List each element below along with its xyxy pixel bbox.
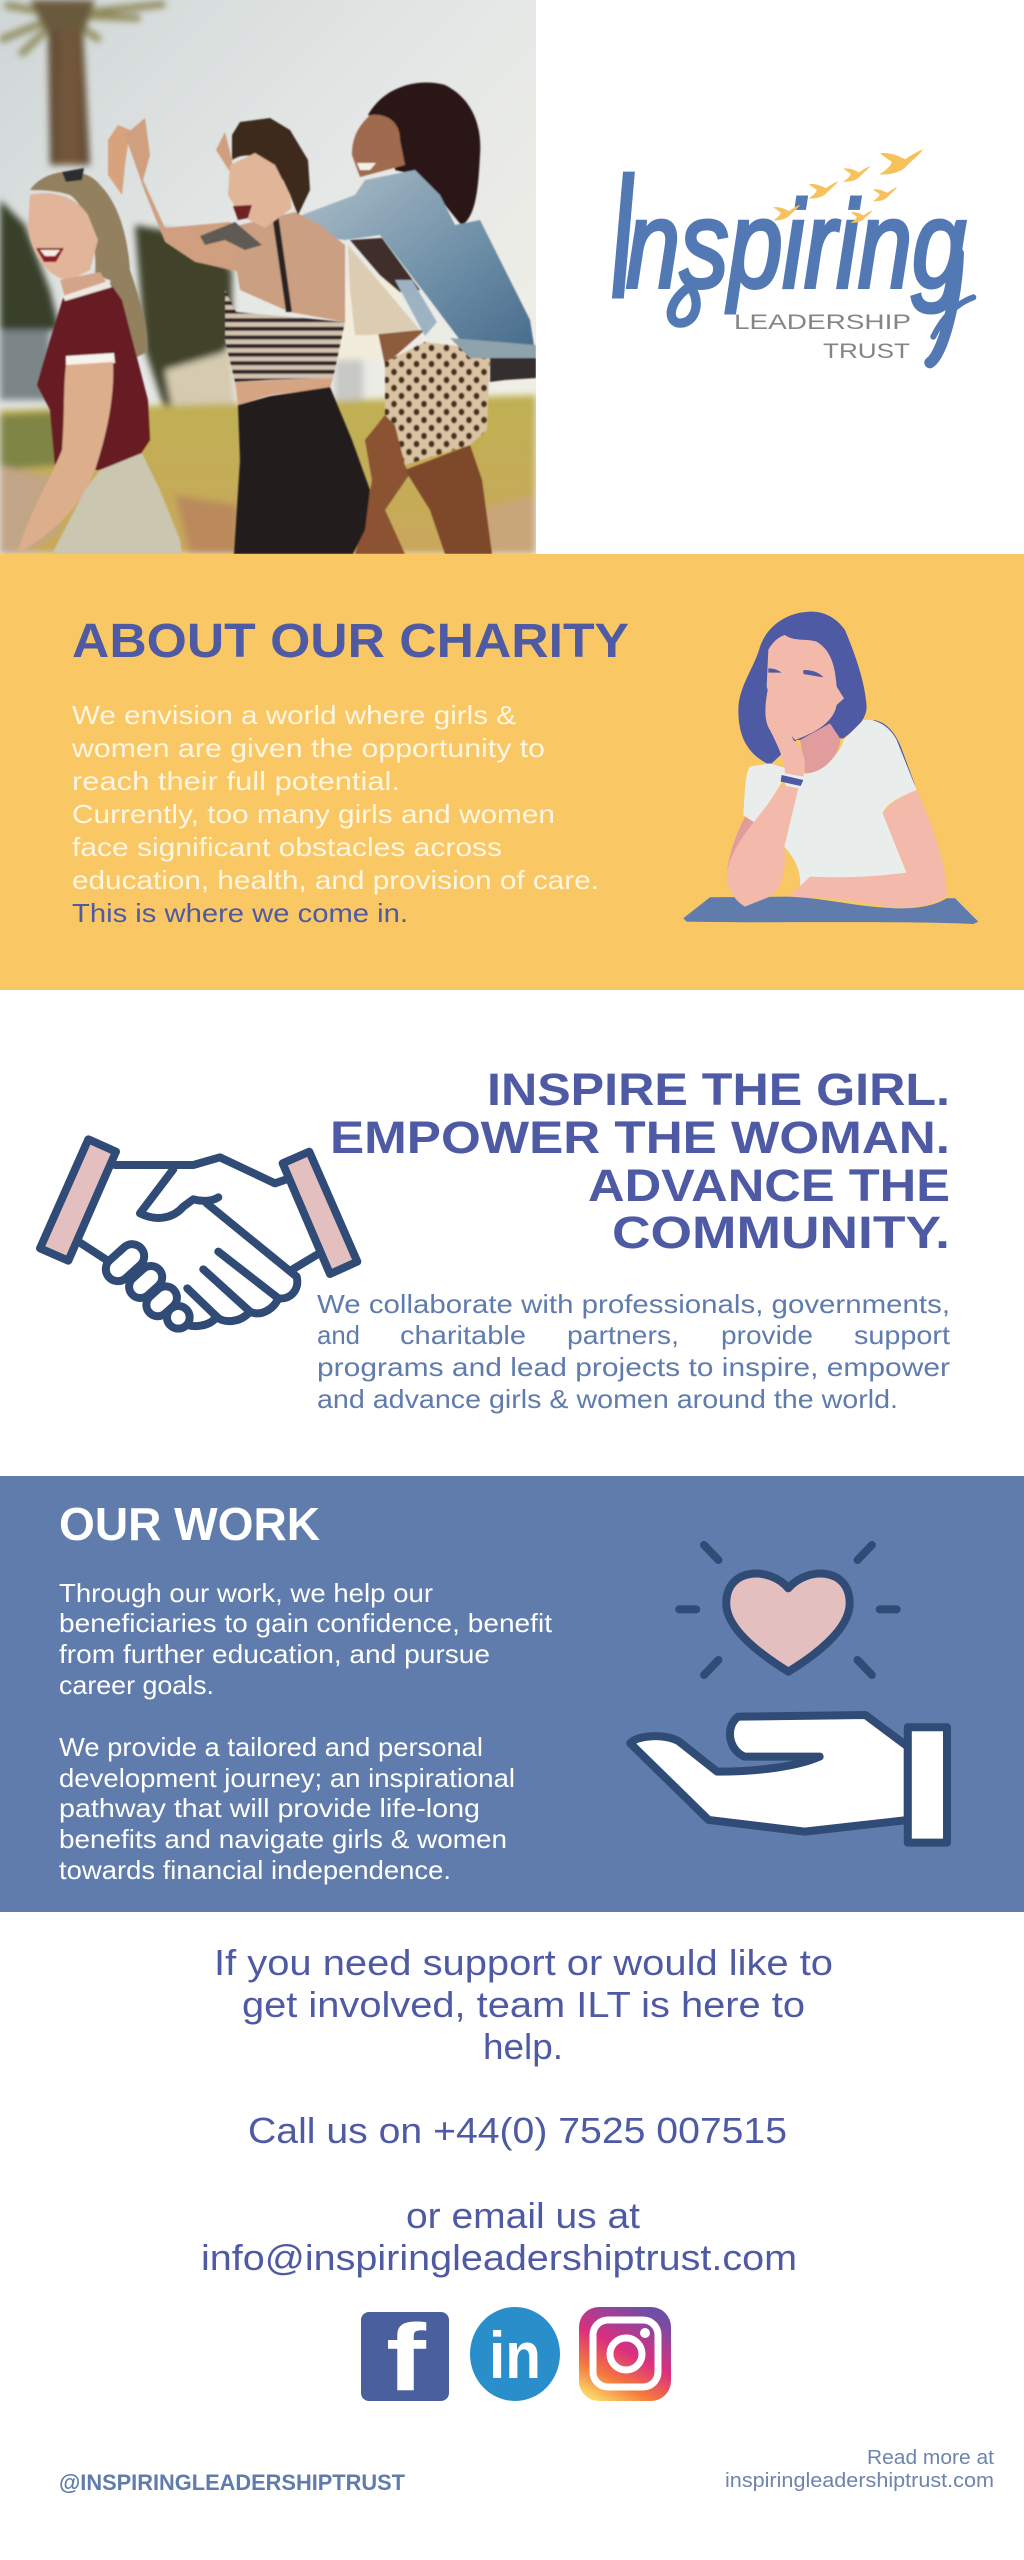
our work body text: from further education, and pursue [59,1639,490,1669]
panel: about our charity [0,554,1024,990]
photo: three women walking [0,0,536,554]
mission body text: We collaborate with professionals, governments, [317,1289,950,1319]
contact text: info@inspiringleadershiptrust.com [201,2237,797,2278]
right woman [302,83,536,554]
contact text: help. [483,2026,563,2067]
icon: open hand [630,1715,947,1843]
mission body text [317,1289,951,1414]
mission body text: and [317,1320,360,1350]
mission heading [330,1064,950,1258]
about body text: This is where we come in. [72,898,408,928]
our work body text: beneficiaries to gain confidence, benefit [59,1608,553,1638]
our work heading: OUR WORK [59,1498,320,1550]
logo: Inspiring Leadership Trust [600,135,973,363]
icon: linkedin [470,2307,560,2401]
contact text: Call us on +44(0) 7525 007515 [248,2110,787,2151]
our work body text: development journey; an inspirational [59,1763,515,1793]
panel: our work [0,1476,1024,1912]
logo birds [773,149,923,223]
our work body text: pathway that will provide life-long [59,1793,480,1823]
footer: website: inspiringleadershiptrust.com [725,2470,994,2492]
mission heading: INSPIRE THE GIRL. [487,1064,950,1115]
about body text: face significant obstacles across [72,832,502,862]
about heading: ABOUT OUR CHARITY [72,615,629,668]
our work body text: Through our work, we help our [59,1578,433,1608]
mission body text: and advance girls & women around the world. [317,1384,898,1414]
logo wordmark [600,135,966,336]
icon: handshake [40,1139,357,1329]
footer: website [725,2447,994,2492]
icon: facebook: f [386,2305,426,2411]
left woman [17,168,182,554]
mission heading: COMMUNITY. [612,1207,950,1258]
logo wordmark: I [600,135,647,336]
about body text: We envision a world where girls & [72,700,516,730]
contact text: If you need support or would like to [214,1942,833,1983]
about body text: Currently, too many girls and women [72,799,555,829]
about body text: reach their full potential. [72,766,400,796]
contact text: or email us at [406,2195,640,2236]
mission heading: ADVANCE THE [588,1160,950,1211]
footer: website: Read more at [867,2447,994,2469]
illustration: thoughtful woman [683,612,978,924]
mission heading: EMPOWER THE WOMAN. [330,1112,950,1163]
footer: handle: @INSPIRINGLEADERSHIPTRUST [59,2470,406,2495]
our work body text: towards financial independence. [59,1855,451,1885]
our work body text [59,1578,553,1885]
logo swashes [671,253,973,363]
about body text: women are given the opportunity to [71,733,545,763]
logo subtitle: LEADERSHIP [734,311,911,334]
icon: linkedin: in [489,2318,541,2392]
icon: facebook [361,2305,449,2411]
social icons [361,2305,671,2411]
contact text: get involved, team ILT is here to [242,1984,805,2025]
our work body text: career goals. [59,1670,214,1700]
mission body text: support [854,1320,951,1350]
icon: instagram [579,2307,671,2401]
mission body text: provide [721,1320,813,1350]
logo subtitle [734,311,911,363]
our work body text: benefits and navigate girls & women [59,1824,507,1854]
middle woman [108,118,370,554]
mission body text: programs and lead projects to inspire, empower [317,1352,950,1382]
icon: glowing heart [679,1545,897,1675]
logo subtitle: TRUST [823,340,910,363]
mission body text: partners, [567,1320,679,1350]
contact text [201,1942,833,2278]
our work body text: We provide a tailored and personal [59,1732,483,1762]
about body text [71,700,599,928]
mission body text: charitable [400,1320,526,1350]
panel: mission [40,1064,951,1414]
about body text: education, health, and provision of care. [72,865,599,895]
